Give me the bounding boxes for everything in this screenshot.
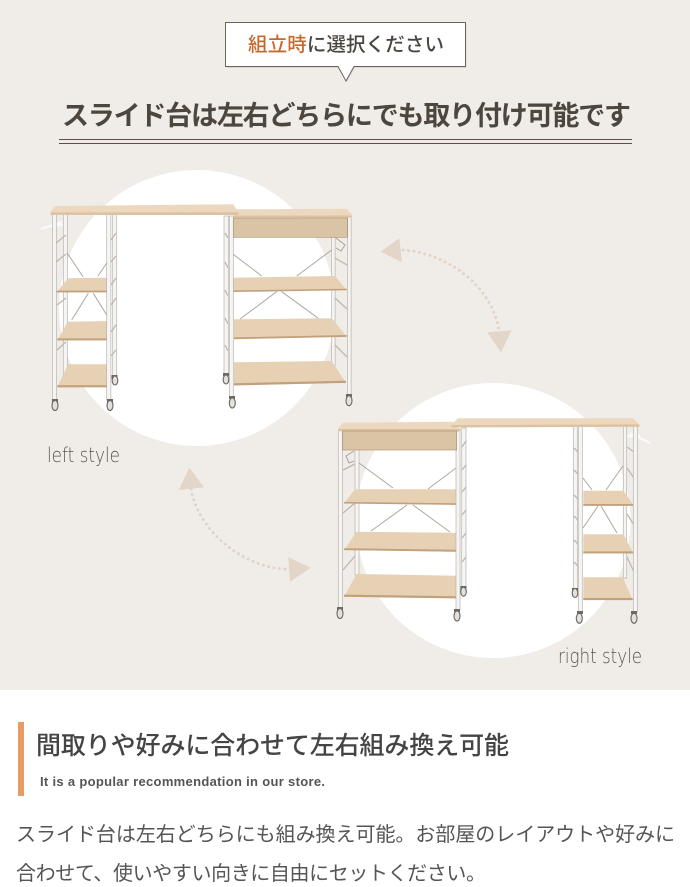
left-side rack frame: [343, 428, 466, 587]
arrow: bottom left double arrow: [179, 468, 311, 582]
right rack wheels: [223, 373, 352, 408]
right rack shelves: [233, 276, 347, 292]
section subheading: It is a popular recommendation in our store.: [40, 774, 325, 789]
right rack top and drawer: [233, 209, 352, 217]
body text: スライド台は左右どちらにも組み換え可能。お部屋のレイアウトや好みに: [16, 823, 675, 846]
sliding table top: [451, 418, 639, 427]
body text: 合わせて、使いやすい向きに自由にセットください。: [16, 862, 486, 885]
hanging hook on right rack: [336, 238, 345, 251]
left rack front legs: [53, 214, 56, 400]
right-side rack shelves: [583, 491, 634, 506]
body text: [16, 823, 675, 885]
upper panel background: [0, 0, 690, 690]
left-side rack wheels: [337, 586, 466, 621]
right-side rack wheels: [572, 588, 637, 623]
right rack frame: [224, 216, 347, 375]
orange accent bar: [18, 722, 24, 796]
left rack frame: [56, 214, 117, 378]
section heading: 間取りや好みに合わせて左右組み換え可能: [36, 732, 509, 760]
left-side rack top and drawer: [338, 422, 462, 432]
right-side rack frame: [573, 426, 634, 590]
speech bubble callout: 組立時に選択ください: [248, 34, 444, 56]
lower panel background: [0, 690, 690, 887]
hook right: [627, 433, 650, 443]
sliding table top: [51, 204, 239, 215]
left-side rack shelves: [344, 489, 457, 505]
right rack front legs: [229, 216, 233, 397]
hook left: [41, 222, 63, 229]
left-side rack front legs: [338, 431, 342, 608]
left rack shelves: [57, 278, 107, 292]
label: right style: right style: [558, 644, 642, 668]
arrow: top right double arrow: [381, 238, 512, 352]
furniture: left style: [41, 204, 352, 410]
right-side rack front legs: [578, 426, 582, 612]
main heading: スライド台は左右どちらにでも取り付け可能です: [62, 101, 631, 131]
white circle: left style: [59, 170, 335, 446]
label: left style: left style: [47, 443, 120, 467]
white circle: right style: [356, 383, 630, 658]
hanging hook on left-side rack: [346, 451, 354, 463]
heading double rule: [59, 139, 632, 144]
speech bubble callout: [226, 22, 466, 82]
furniture: right style: [337, 418, 650, 623]
left rack wheels: [52, 375, 118, 410]
